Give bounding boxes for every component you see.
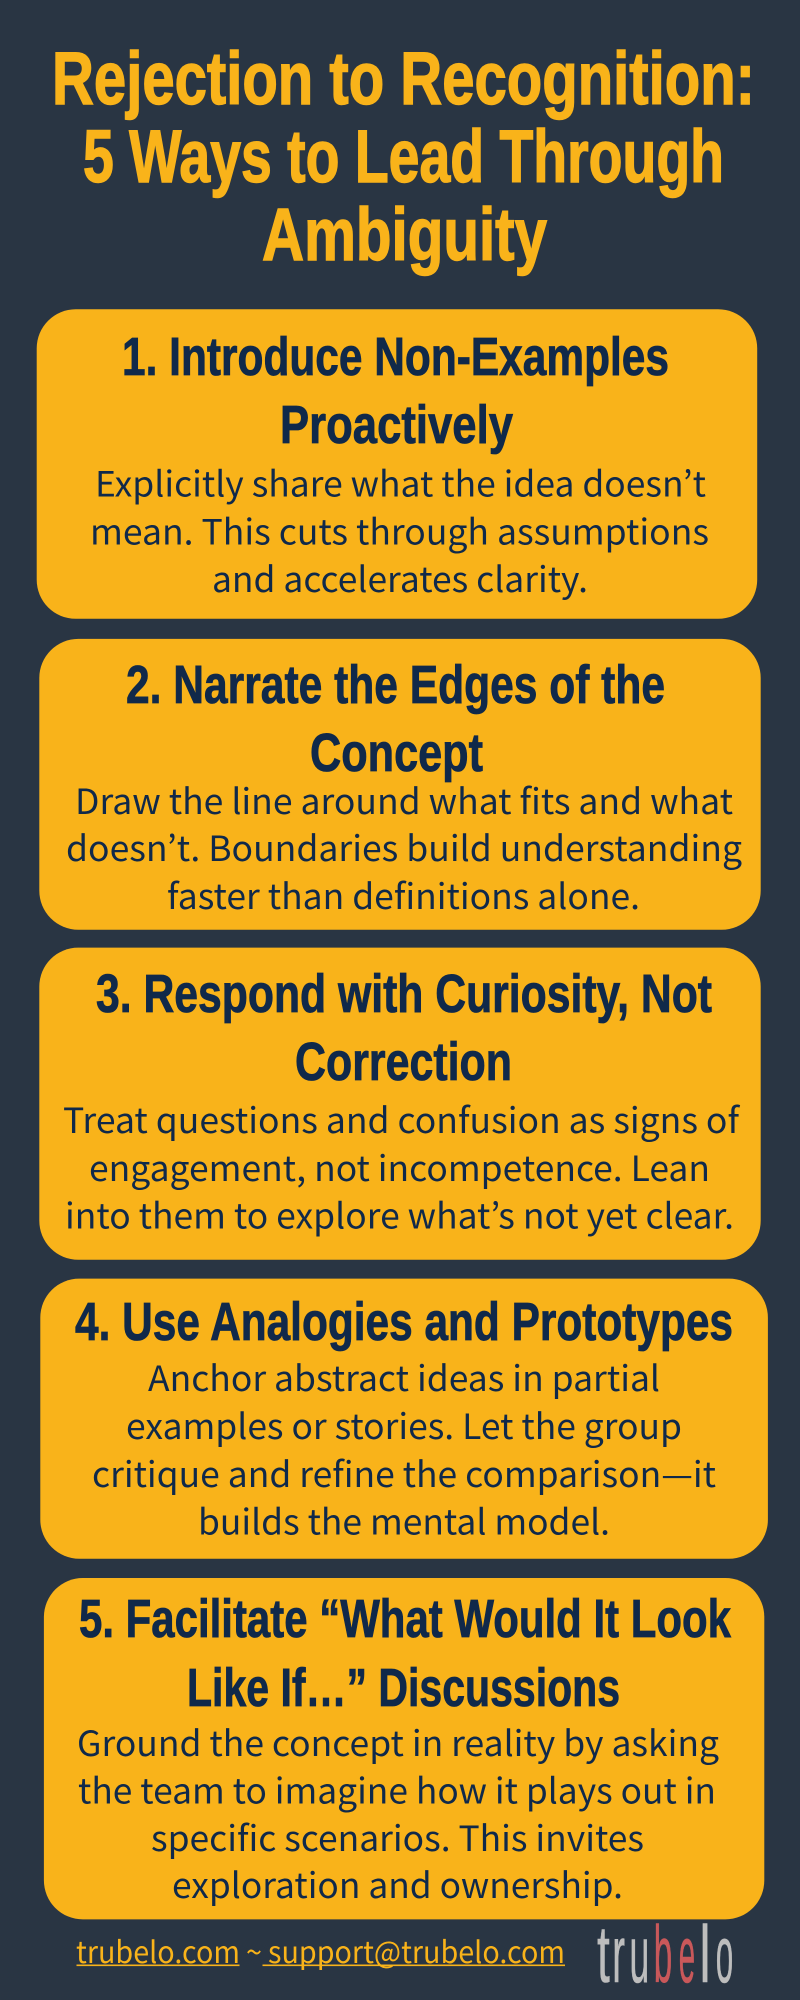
text: card 2 body: faster than definitions alone. [167,869,640,920]
text: card 2 body: doesn’t. Boundaries build understanding [66,821,742,872]
title [52,37,755,276]
logo: trubelo: e [679,1910,695,2000]
heading: card 3 [96,965,712,1092]
logo: trubelo [597,1910,733,2000]
text: card 4 body: examples or stories. Let the group [126,1399,682,1450]
logo: trubelo: b [654,1910,672,2000]
text: card 1 body: Explicitly share what the idea doesn’t [95,456,706,508]
panel: 5. Facilitate "What Would It Look Like If..." Discussions [44,1578,764,1919]
text: card 5 body [77,1716,719,1909]
text: o [716,1910,733,2000]
title: Ambiguity [262,193,547,276]
heading: card 5: Like If…” Discussions [187,1659,620,1718]
text: card 4 body: builds the mental model. [198,1494,610,1546]
logo: trubelo: u [630,1910,649,2000]
text: card 2 body: Draw the line around what fits and what [75,774,733,825]
text: card 1 body [90,456,709,603]
footer links: support@trubelo.com [268,1928,565,1972]
text: card 5 body: specific scenarios. This invites [151,1811,644,1862]
heading: card 1: Proactively [280,396,513,455]
text: card 1 body: mean. This cuts through assumptions [90,504,709,556]
panel: 4. Use Analogies and Prototypes [40,1279,768,1559]
panel: 1. Introduce Non-Examples Proactively [37,309,757,619]
panel: 3. Respond with Curiosity, Not Correction [39,948,761,1260]
heading: card 2 [126,656,665,783]
logo: trubelo: r [612,1910,625,2000]
heading: card 3: Correction [295,1033,512,1092]
text: card 5 body: the team to imagine how it plays out in [78,1764,716,1814]
logo: trubelo: l [700,1910,710,2000]
text: card 4 body: Anchor abstract ideas in partial [148,1351,660,1402]
footer links: ~ [246,1928,262,1972]
text: card 3 body: engagement, not incompetence. Lean [89,1141,710,1192]
heading: card 1: 1. Introduce Non-Examples [122,328,669,387]
logo: trubelo: t [597,1910,610,2000]
text: card 3 body [63,1093,741,1240]
panel: 2. Narrate the Edges of the Concept [39,639,761,930]
text: card 2 body [66,774,742,920]
text: card 3 body: Treat questions and confusion as signs of [63,1093,741,1144]
text: card 3 body: into them to explore what’s not yet clear. [65,1188,734,1240]
text: card 5 body: Ground the concept in reality by asking [77,1716,719,1767]
heading: card 2: Concept [310,724,483,783]
text: card 5 body: exploration and ownership. [172,1858,623,1909]
heading: card 1 [122,328,669,455]
heading: card 5 [79,1590,731,1718]
heading: card 2: 2. Narrate the Edges of the [126,656,665,715]
text: card 4 body [92,1351,716,1546]
text: card 1 body: and accelerates clarity. [212,552,588,603]
footer links [76,1928,565,1972]
footer links: trubelo.com [76,1928,240,1972]
text: card 4 body: critique and refine the comparison—it [92,1447,716,1498]
